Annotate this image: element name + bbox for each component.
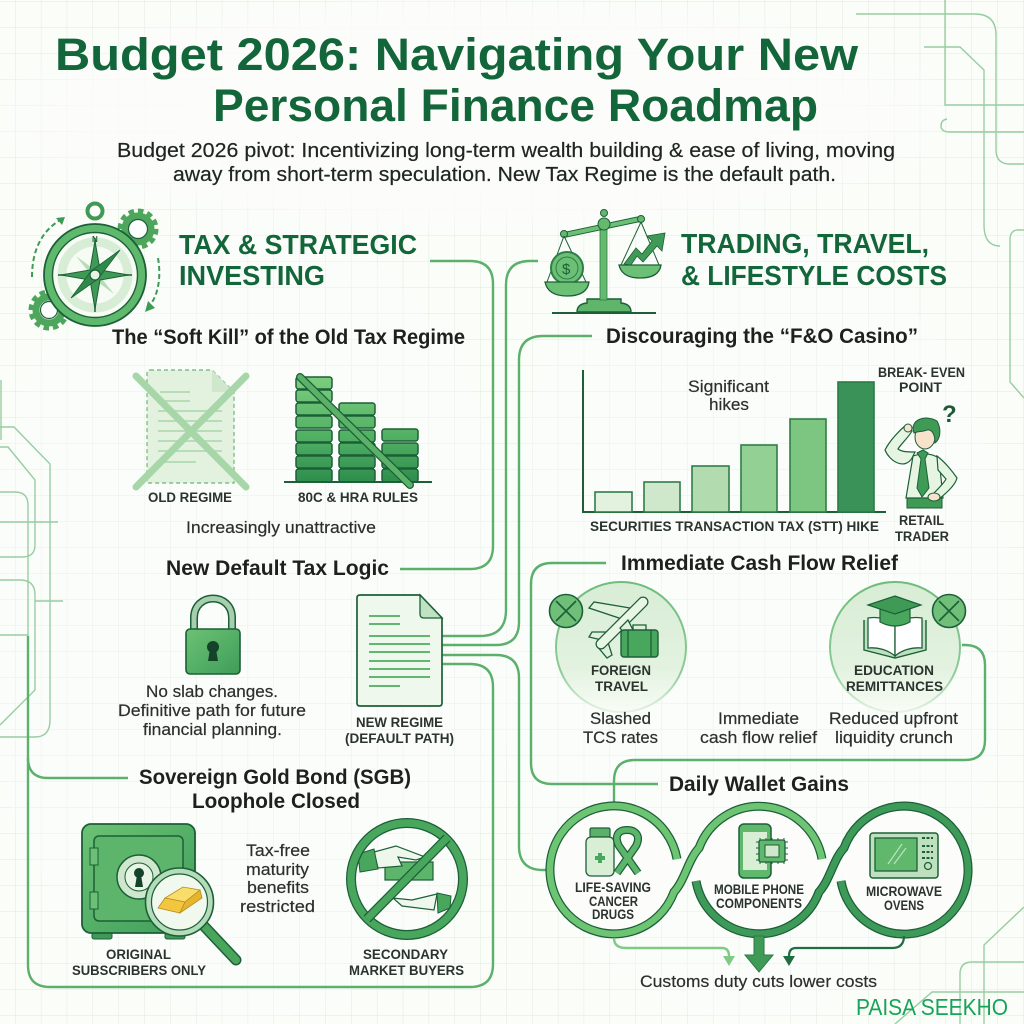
label: new regime default path: NEW REGIME (356, 715, 443, 730)
heading: F&O casino: Discouraging the “F&O Casino” (606, 325, 918, 348)
label: mobile phone components: COMPONENTS (716, 896, 802, 911)
icon: medicine bottle and ribbon (586, 828, 638, 876)
label: original subscribers only (72, 947, 206, 978)
label: life-saving cancer drugs (575, 880, 651, 922)
icon: stacked 80C and HRA blocks (284, 377, 432, 485)
subtitle (117, 140, 895, 186)
icon: lower gear (31, 292, 67, 328)
heading: trading travel lifestyle costs: TRADING, TRAVEL, (681, 228, 929, 259)
label: mobile phone components (714, 882, 804, 911)
text: reduced upfront liquidity crunch: liquidity crunch (835, 728, 953, 747)
item: foreign travel (550, 582, 686, 712)
label: foreign travel: FOREIGN (591, 663, 651, 678)
text: immediate cash flow relief: Immediate (718, 709, 799, 728)
heading: immediate cash flow relief: Immediate Cash Flow Relief (621, 552, 899, 575)
heading: sovereign gold bond (139, 766, 411, 813)
icon: confused retail trader (885, 401, 957, 508)
icon: prohibited secondary market exchange (351, 823, 463, 935)
label: education remittances: REMITTANCES (846, 679, 943, 694)
icon: upper gear (120, 211, 156, 247)
panel: immediate cash flow relief (550, 552, 966, 747)
icon: balance scale (545, 210, 665, 313)
label: 80C and HRA rules: 80C & HRA RULES (298, 490, 418, 505)
heading: sovereign gold bond: Sovereign Gold Bond (SGB) (139, 766, 411, 789)
title: Budget 2026: Navigating Your New (55, 29, 859, 80)
text: tax-free maturity benefits restricted: Tax-free (246, 841, 310, 860)
label: retail trader: RETAIL (899, 513, 944, 528)
heading: tax and strategic investing (179, 229, 417, 291)
icon: crossed out old regime document (136, 370, 246, 487)
chain of linked rings (550, 806, 968, 934)
label: microwave ovens: MICROWAVE (866, 884, 942, 899)
label: break-even point (878, 365, 965, 395)
label: foreign travel (591, 663, 651, 694)
label: microwave ovens (866, 884, 942, 913)
text: immediate cash flow relief (700, 709, 817, 747)
callout: significant hikes: hikes (709, 395, 749, 414)
caption: customs duty cuts: Customs duty cuts lower costs (640, 972, 877, 991)
text: reduced upfront liquidity crunch: Reduced upfront (829, 709, 958, 728)
text: tax-free maturity benefits restricted: benefits (247, 878, 309, 897)
label: mobile phone components: MOBILE PHONE (714, 882, 804, 897)
connector lines (28, 261, 985, 987)
label: new regime default path: (DEFAULT PATH) (345, 731, 454, 746)
text: tax-free maturity benefits restricted (240, 841, 315, 916)
icon: graduation cap and book (864, 596, 926, 658)
icon: balance scale: $ (562, 261, 571, 278)
label: secondary market buyers (349, 947, 464, 978)
text: reduced upfront liquidity crunch (829, 709, 958, 747)
text: no slab changes: financial planning. (143, 720, 282, 739)
label: life-saving cancer drugs: CANCER (589, 894, 638, 909)
heading: tax and strategic investing: INVESTING (179, 260, 325, 291)
heading: trading travel lifestyle costs: & LIFESTYLE COSTS (681, 260, 947, 291)
label: retail trader (895, 513, 949, 544)
icon: padlock (186, 598, 240, 674)
title: Personal Finance Roadmap (213, 80, 818, 131)
label: break-even point: POINT (899, 380, 943, 395)
panel: discouraging the F&O casino (583, 325, 965, 544)
label: life-saving cancer drugs: LIFE-SAVING (575, 880, 651, 895)
label: microwave ovens: OVENS (884, 898, 924, 913)
icon: phone with chip (739, 824, 788, 878)
text: slashed TCS rates (583, 709, 658, 747)
heading: new default tax logic: New Default Tax Logic (166, 557, 389, 580)
text: slashed TCS rates: Slashed (590, 709, 651, 728)
panel: sovereign gold bond loophole (72, 766, 464, 978)
heading: soft kill: The “Soft Kill” of the Old Tax Regime (112, 326, 465, 349)
icon: new regime document (357, 595, 442, 706)
icon: microwave oven (870, 833, 938, 878)
panel: daily wallet gains (550, 773, 968, 991)
icon: safe with magnified gold bar (82, 824, 236, 960)
icon: airplane and suitcase (589, 602, 658, 658)
caption: increasingly unattractive: Increasingly unattractive (186, 518, 376, 537)
brand: paisa seekho: PAISA SEEKHO (856, 994, 1008, 1020)
item: education remittances (830, 582, 966, 712)
label: education remittances: EDUCATION (854, 663, 934, 678)
panel: soft kill of old tax regime (112, 326, 465, 537)
label: secondary market buyers: MARKET BUYERS (349, 963, 464, 978)
icon: confused retail trader: ? (942, 401, 957, 428)
arrow: from drugs ring (614, 938, 735, 966)
label: old regime: OLD REGIME (148, 490, 232, 505)
icon: compass with gears (31, 204, 159, 328)
icon: crossed circle badge (932, 594, 966, 628)
text: tax-free maturity benefits restricted: restricted (240, 897, 315, 916)
label: original subscribers only: SUBSCRIBERS ONLY (72, 963, 206, 978)
heading: trading travel lifestyle costs (681, 228, 947, 291)
icon: compass with gears: N (92, 235, 98, 244)
text: no slab changes: No slab changes. (146, 682, 278, 701)
label: new regime default path (345, 715, 454, 746)
subtitle: away from short-term speculation. New Tax Regime is the default path. (173, 164, 836, 186)
subtitle: Budget 2026 pivot: Incentivizing long-term wealth building & ease of living, moving (117, 140, 895, 162)
panel: new default tax logic (118, 557, 454, 746)
label: secondary market buyers: SECONDARY (363, 947, 448, 962)
text: immediate cash flow relief: cash flow relief (700, 728, 817, 747)
text: no slab changes: Definitive path for future (118, 701, 306, 720)
title (55, 29, 859, 131)
heading: tax and strategic investing: TAX & STRATEGIC (179, 229, 417, 260)
arrow: from microwave ring (783, 936, 904, 966)
bar chart: securities transaction tax hike (583, 370, 886, 512)
heading: sovereign gold bond: Loophole Closed (192, 790, 360, 813)
icon: crossed circle badge (550, 594, 582, 628)
label: retail trader: TRADER (895, 529, 949, 544)
text: tax-free maturity benefits restricted: maturity (246, 860, 310, 879)
label: STT hike axis: SECURITIES TRANSACTION TAX (STT) HIKE (590, 519, 879, 534)
label: education remittances (846, 663, 943, 694)
text: slashed TCS rates: TCS rates (583, 728, 658, 747)
callout: significant hikes: Significant (688, 377, 769, 396)
label: life-saving cancer drugs: DRUGS (592, 907, 634, 922)
text: no slab changes (118, 682, 306, 739)
label: break-even point: BREAK- EVEN (878, 365, 965, 380)
label: original subscribers only: ORIGINAL (106, 947, 171, 962)
label: foreign travel: TRAVEL (595, 679, 648, 694)
heading: daily wallet gains: Daily Wallet Gains (669, 773, 849, 796)
arrow: from phone ring (745, 936, 773, 972)
callout: significant hikes (688, 377, 769, 414)
